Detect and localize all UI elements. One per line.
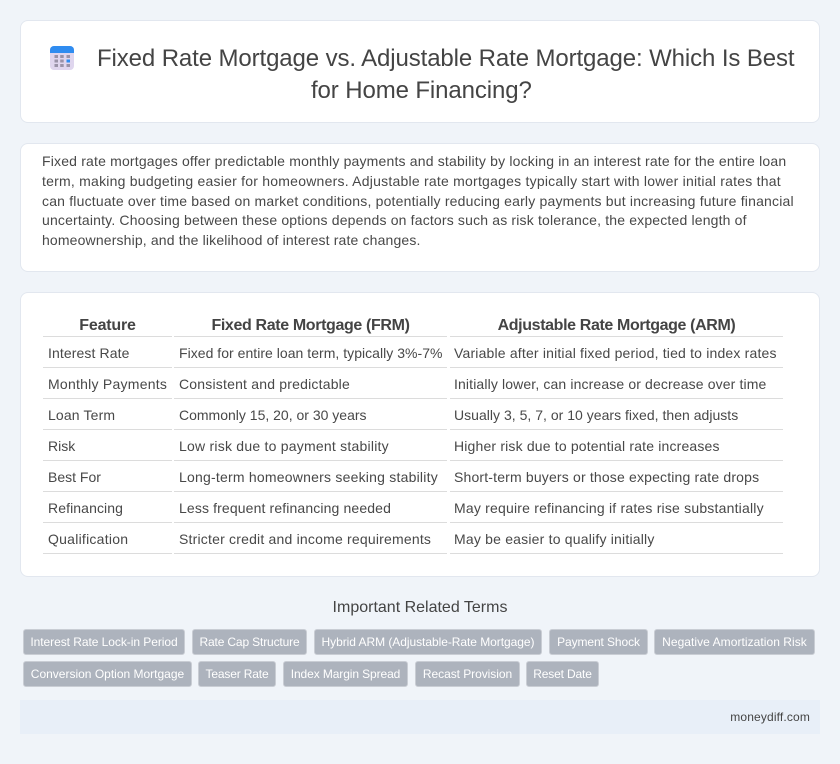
comparison table: Loan Term — [48, 407, 115, 423]
comparison table: Less frequent refinancing needed — [179, 500, 391, 516]
comparison table: Fixed for entire loan term, typically 3%-7% — [179, 345, 443, 361]
footer source: moneydiff.com — [730, 710, 810, 724]
related terms tags: Rate Cap Structure — [199, 635, 300, 649]
intro text — [42, 153, 794, 248]
comparison table: Usually 3, 5, 7, or 10 years fixed, then adjusts — [454, 407, 738, 423]
comparison table panel — [20, 292, 820, 577]
comparison table: Interest Rate — [48, 345, 129, 361]
comparison table: Risk — [48, 438, 75, 454]
comparison table: May require refinancing if rates rise substantially — [454, 500, 764, 516]
title — [97, 45, 794, 104]
comparison table: Low risk due to payment stability — [179, 438, 389, 454]
title: Fixed Rate Mortgage vs. Adjustable Rate Mortgage: Which Is Best — [97, 45, 794, 72]
comparison table: Stricter credit and income requirements — [179, 531, 431, 547]
intro text: Fixed rate mortgages offer predictable monthly payments and stability by locking in an interest rate for the entire loan — [42, 153, 786, 169]
comparison table: Variable after initial fixed period, tied to index rates — [454, 345, 777, 361]
comparison table: Monthly Payments — [48, 376, 167, 392]
comparison table: Adjustable Rate Mortgage (ARM) — [498, 317, 735, 334]
intro text: homeownership, and the likelihood of interest rate changes. — [42, 232, 421, 248]
related terms heading: Important Related Terms — [333, 599, 507, 616]
title: for Home Financing? — [311, 77, 532, 104]
intro text panel — [20, 143, 820, 272]
comparison table: Long-term homeowners seeking stability — [179, 469, 438, 485]
intro text: can fluctuate over time based on market conditions, potentially reducing early payments but increasing future financial — [42, 193, 794, 209]
comparison table: Short-term buyers or those expecting rate drops — [454, 469, 759, 485]
related terms tags: Reset Date — [533, 667, 592, 681]
comparison table: Refinancing — [48, 500, 123, 516]
comparison table: Commonly 15, 20, or 30 years — [179, 407, 367, 423]
related terms tags: Payment Shock — [557, 635, 640, 649]
comparison table — [43, 317, 783, 554]
comparison table: Higher risk due to potential rate increases — [454, 438, 720, 454]
comparison table: Qualification — [48, 531, 128, 547]
intro text: term, making budgeting easier for homeowners. Adjustable rate mortgages typically start with lower initial rates that — [42, 173, 781, 189]
icon: calendar — [50, 46, 74, 70]
related terms tags: Interest Rate Lock-in Period — [30, 635, 178, 649]
comparison table: Feature — [79, 317, 136, 334]
comparison table: Fixed Rate Mortgage (FRM) — [211, 317, 410, 334]
related terms tags: Negative Amortization Risk — [662, 635, 807, 649]
footer bar — [20, 700, 820, 734]
intro text: uncertainty. Choosing between these options depends on factors such as risk tolerance, the expected length of — [42, 212, 747, 228]
comparison table: Best For — [48, 469, 101, 485]
comparison table: Consistent and predictable — [179, 376, 350, 392]
related terms tags: Hybrid ARM (Adjustable-Rate Mortgage) — [322, 635, 534, 649]
comparison table: May be easier to qualify initially — [454, 531, 655, 547]
related terms tags — [23, 629, 815, 687]
related terms tags: Index Margin Spread — [291, 667, 400, 681]
related terms tags: Conversion Option Mortgage — [31, 667, 184, 681]
header card — [20, 20, 820, 123]
comparison table: Initially lower, can increase or decrease over time — [454, 376, 766, 392]
related terms tags: Teaser Rate — [205, 667, 269, 681]
related terms tags: Recast Provision — [423, 667, 512, 681]
